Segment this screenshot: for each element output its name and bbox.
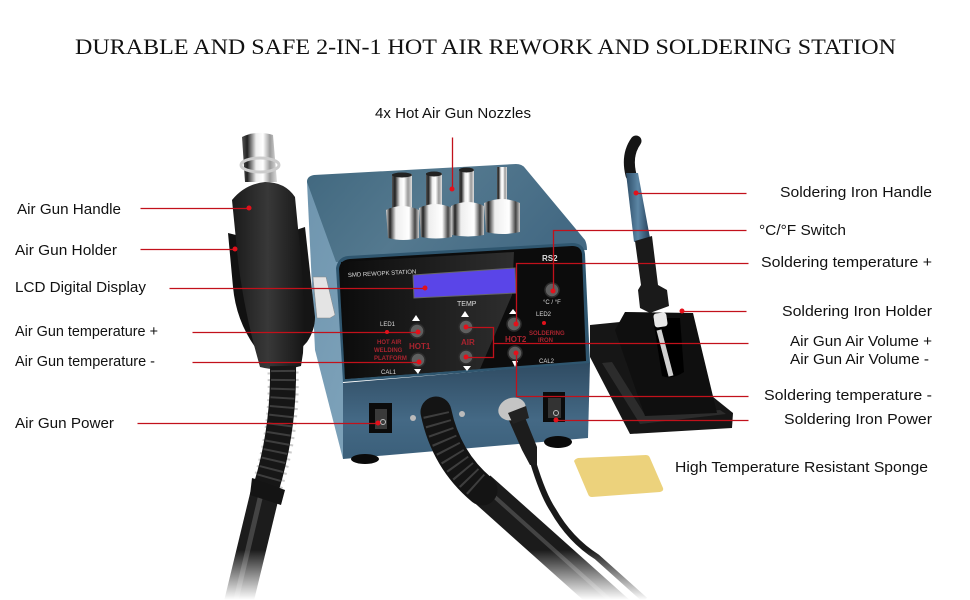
panel labels: AIR xyxy=(461,338,475,347)
gun hose xyxy=(238,485,267,600)
station top face xyxy=(307,164,587,262)
labels xyxy=(15,105,932,476)
station side face xyxy=(307,176,343,459)
gun body xyxy=(232,182,304,369)
panel labels: CAL1 xyxy=(381,370,397,376)
clip on station side xyxy=(313,277,335,318)
air gun power switch xyxy=(369,403,392,433)
gun hose collar xyxy=(250,478,285,505)
panel labels: IRON xyxy=(538,338,553,344)
panel labels: WELDING xyxy=(374,348,403,354)
gun holder flanks xyxy=(228,233,268,366)
panel labels: HOT2 xyxy=(505,335,527,344)
feet xyxy=(351,436,572,464)
bottom fade xyxy=(190,550,660,600)
label: air volume plus: Air Gun Air Volume + xyxy=(790,333,932,350)
soldering iron xyxy=(626,141,669,313)
station lower front xyxy=(343,362,590,459)
label: soldering temperature minus: Soldering temperature - xyxy=(764,387,932,404)
gun nozzle xyxy=(242,133,277,182)
gun strain relief lace xyxy=(267,372,283,486)
screws xyxy=(410,411,465,421)
panel labels: HOT AIR xyxy=(377,340,402,346)
gun strain relief xyxy=(266,366,283,488)
center hose xyxy=(436,412,640,600)
iron handle xyxy=(626,173,650,242)
panel sheen xyxy=(341,252,514,379)
sponge xyxy=(574,455,663,497)
soldering iron power switch xyxy=(543,392,565,422)
panel labels: HOT1 xyxy=(409,342,431,351)
nozzle 3 xyxy=(451,168,484,236)
stand tray xyxy=(590,322,733,434)
gun nozzle ring xyxy=(241,158,279,172)
control panel xyxy=(339,246,586,379)
soldering stand xyxy=(590,312,733,434)
iron tip rod xyxy=(659,330,671,376)
nozzles xyxy=(386,167,520,240)
callout dots xyxy=(232,186,684,426)
callout lines xyxy=(138,138,748,424)
label: air volume minus: Air Gun Air Volume - xyxy=(790,351,929,368)
station name: SMD REWOPK STATION xyxy=(348,269,416,279)
LCD display xyxy=(413,268,516,298)
air gun xyxy=(228,133,315,600)
label: iron handle: Soldering Iron Handle xyxy=(780,184,932,201)
iron knurl xyxy=(653,312,668,328)
control panel frame xyxy=(336,243,590,382)
panel labels: LED1 xyxy=(380,322,396,328)
panel labels: CAL2 xyxy=(539,359,555,365)
label: air gun handle: Air Gun Handle xyxy=(17,201,121,218)
panel labels: TEMP xyxy=(457,301,477,308)
label: air gun temperature minus: Air Gun temperature - xyxy=(15,353,155,370)
panel buttons xyxy=(410,283,559,367)
label: nozzles: 4x Hot Air Gun Nozzles xyxy=(375,105,531,122)
panel arrows xyxy=(412,309,518,374)
panel labels xyxy=(374,254,565,376)
label: sponge: High Temperature Resistant Sponge xyxy=(675,459,928,476)
panel labels: RS2 xyxy=(542,254,558,263)
label: soldering temperature plus: Soldering temperature + xyxy=(761,254,932,271)
nozzle 2 xyxy=(419,172,452,238)
label: air gun temperature plus: Air Gun temperature + xyxy=(15,323,158,340)
label: iron power: Soldering Iron Power xyxy=(784,411,932,428)
iron cable xyxy=(629,141,636,175)
nozzle 1 xyxy=(386,172,419,240)
panel labels: PLATFORM xyxy=(374,356,407,362)
panel labels: °C / °F xyxy=(543,300,561,306)
label: air gun power: Air Gun Power xyxy=(15,415,114,432)
label: lcd: LCD Digital Display xyxy=(15,279,146,296)
label: iron holder: Soldering Iron Holder xyxy=(782,303,932,320)
stand body xyxy=(615,312,717,416)
stand slot xyxy=(653,318,684,377)
label: air gun holder: Air Gun Holder xyxy=(15,242,117,259)
soldering station unit xyxy=(307,164,590,464)
panel labels: LED2 xyxy=(536,312,552,318)
title: DURABLE AND SAFE 2-IN-1 HOT AIR REWORK AND SOLDERING STATION xyxy=(75,34,896,59)
iron cable and connector xyxy=(495,394,645,600)
panel labels: SOLDERING xyxy=(529,331,565,337)
nozzle 4 xyxy=(484,167,520,234)
iron grip xyxy=(635,236,669,313)
label: switch: °C/°F Switch xyxy=(759,222,846,239)
